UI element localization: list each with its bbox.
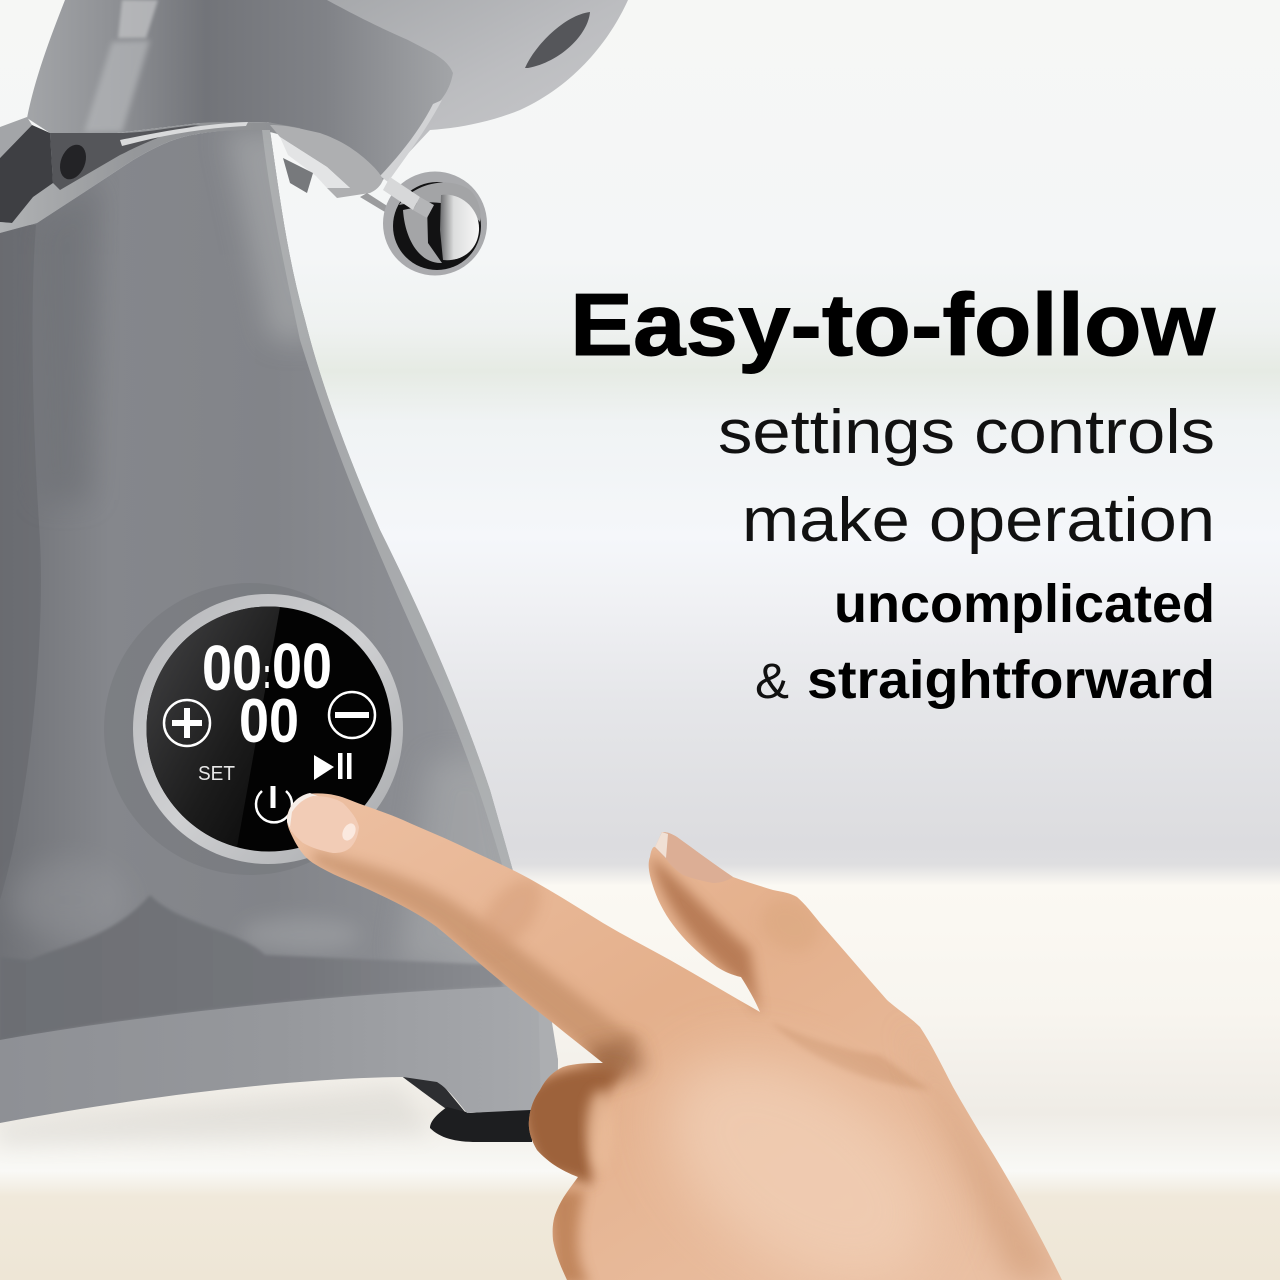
band glint	[120, 122, 248, 146]
speed readout: 00	[239, 687, 299, 756]
middle fingernail	[655, 832, 733, 883]
mixer pillar and body	[0, 130, 545, 1045]
control dial collar	[104, 583, 396, 875]
top right highlight	[225, 130, 301, 346]
ball stem shadow	[360, 193, 392, 212]
trim lip	[270, 125, 383, 198]
head vent slot	[525, 12, 590, 68]
outer hand edge shadow	[936, 1096, 1058, 1280]
dark metal recess	[0, 125, 53, 223]
hand pressing the power button	[287, 793, 1062, 1280]
neck reflection lower	[84, 40, 150, 132]
lip inner light strip	[280, 137, 350, 188]
headline text block	[570, 275, 1216, 710]
left outer band	[0, 117, 32, 158]
nail highlight	[340, 821, 358, 843]
nail plate	[290, 796, 359, 853]
index finger underside shadow	[313, 850, 640, 1063]
counter shadow under mixer	[0, 1085, 430, 1145]
mixer neck	[27, 0, 453, 180]
foot disc	[430, 1107, 532, 1142]
base plate	[0, 985, 558, 1123]
ampersand: &	[755, 653, 789, 709]
index fingernail	[287, 793, 359, 853]
control panel	[133, 594, 403, 864]
minus button	[329, 692, 375, 738]
web shadow between thumb and index	[585, 1040, 645, 1085]
hole in band	[55, 141, 91, 183]
nail tip	[287, 793, 320, 832]
line: uncomplicated: uncomplicated	[834, 574, 1215, 634]
line: settings controls: settings controls	[718, 398, 1215, 467]
appliance: stand mixer	[0, 0, 628, 1142]
timer seconds: 00	[272, 630, 332, 702]
arm reflection in ball	[403, 205, 442, 263]
timer minutes: 00	[202, 632, 262, 704]
rubber foot	[400, 1075, 532, 1142]
panel ring	[133, 594, 403, 864]
line: straightforward: straightforward	[807, 650, 1215, 710]
trim band	[0, 122, 300, 233]
plus button	[164, 700, 210, 746]
timer readout	[202, 630, 332, 704]
bright edge strip	[262, 130, 512, 870]
timer colon: :	[263, 649, 271, 698]
hand shape	[287, 793, 1062, 1280]
line: make operation: make operation	[742, 486, 1215, 555]
back of hand highlight	[656, 1044, 932, 1280]
ring finger shadow	[548, 1190, 590, 1280]
base right strip	[538, 985, 558, 1108]
neck rim highlight	[380, 100, 442, 182]
ball dark interior	[393, 182, 481, 270]
ball rim	[383, 172, 487, 276]
right lower highlight	[404, 766, 496, 962]
ball stem	[383, 177, 420, 210]
knuckle ridge	[586, 1090, 614, 1170]
ball stem tip	[413, 197, 434, 218]
mixer head	[300, 0, 628, 178]
thumb shadow	[523, 1066, 625, 1185]
neck reflection upper	[118, 0, 158, 38]
left lower light patch	[18, 870, 98, 930]
index knuckle shading	[485, 880, 541, 939]
nail tip	[655, 832, 668, 858]
bracket	[283, 158, 313, 193]
body shading	[0, 130, 547, 990]
power button	[256, 786, 292, 822]
foot arch	[400, 1075, 470, 1118]
ball bright hemisphere	[440, 195, 479, 260]
base well shadow	[0, 895, 503, 1040]
title: Easy-to-follow	[570, 275, 1216, 374]
lower light patch	[247, 917, 352, 953]
play pause button	[314, 753, 352, 780]
middle finger shadow	[650, 855, 760, 1015]
panel black glass	[146, 606, 392, 852]
ball upper reflection	[399, 183, 481, 222]
chrome ball knob	[383, 172, 487, 276]
dark band with hole	[50, 125, 200, 190]
panel gloss reflection	[146, 607, 280, 847]
middle finger to hand crease	[780, 1027, 924, 1090]
middle knuckle	[806, 906, 814, 938]
top left shadow	[51, 193, 96, 487]
hand shading	[313, 850, 1062, 1280]
left seam panel	[0, 225, 41, 834]
nail plate	[655, 832, 733, 883]
set label: SET	[198, 763, 235, 785]
